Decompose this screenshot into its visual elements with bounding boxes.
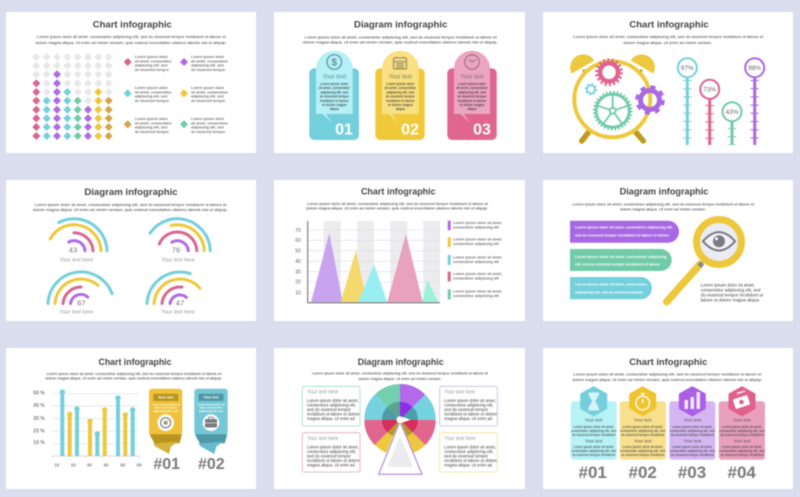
teal pill [570,277,652,299]
intro text: Lorem ipsum dolor sit amet, consectetur adipiscing elit, sed do eiusmod tempor incididunt ut labore et [307,201,489,206]
legend: do eiusmod tempor [135,67,170,72]
legend: adipiscing elit, sed [191,94,224,98]
card 02: do eiusmod tempor [386,95,416,99]
legend: sit amet, consectetur [135,89,172,94]
card 01 [309,51,359,140]
text box top left: Your text here [307,390,338,396]
icon: rising bars [684,392,700,409]
hex card 01: Lorem ipsum dolor sit amet, [573,445,614,449]
intro text [312,371,489,381]
card 03: 03 [473,122,491,138]
pink gear [597,60,621,85]
legend: do eiusmod tempor [135,98,170,103]
hex card 03: Lorem ipsum dolor sit amet, [672,425,713,429]
card 02: et dolore magna [388,103,413,107]
hex card 02: do eiusmod tempor incididunt [621,433,664,437]
side text: Lorem ipsum dolor sit amet, [701,283,755,288]
lollipop bar 97% [678,58,697,145]
card 02: 02 [401,122,419,138]
title: Chart infographic [629,356,707,367]
text box top right: consectetur adipiscing elit, [444,402,493,408]
panel: clock gears and lollipop bars [543,12,793,153]
bar chart: 60 [137,462,142,467]
legend: consectetur adipiscing elit [453,293,500,298]
bar chart: 50 % [33,390,45,396]
badge #01: adipiscing elit, sed [154,409,178,413]
bar chart: 40 [103,462,109,467]
legend [448,220,502,299]
legend: do eiusmod tempor [135,129,170,134]
teal pill: adipiscing elit, sed do eiusmod tempor [575,289,643,294]
purple pill: Lorem ipsum dolor sit amet, consectetur adipiscing elit, [575,224,673,230]
card 01: 01 [335,122,353,138]
title: Diagram infographic [84,186,178,197]
legend [125,54,229,134]
hex card 03: do eiusmod tempor incididunt [671,453,714,457]
hex card 01: consectetur adipiscing elit, sed [571,429,616,433]
title: Diagram infographic [358,356,444,367]
intro text: dolore magna aliqua. Ut enim ad minim veniam, quis nostrud exercitation ullamco laboris nisi ut aliquip. [33,207,228,212]
side text: do eiusmod tempor incididunt ut [701,292,764,298]
arc chart 76: 76 [172,246,180,254]
hex card 03 [669,387,715,460]
legend: Lorem ipsum dolor sit amet, [453,237,502,242]
card 03: sit amet, consectetur [456,86,489,90]
badge #01: Your text [158,396,174,400]
icon: eye [703,232,735,250]
arc chart 67: Your text here [60,310,93,316]
text box bottom left: consectetur adipiscing elit, [307,449,356,454]
panel: triangle chart [274,180,525,321]
icon: stopwatch [636,394,650,410]
intro text [572,201,755,211]
card 01: adipiscing elit, sed [320,90,348,94]
text box top left: consectetur adipiscing elit, [307,402,356,408]
triangle area chart: 10 [295,290,301,296]
panel: three numbered cards [274,12,525,153]
badge number 02: #02 [198,456,225,473]
legend: Lorem ipsum dolor [135,85,168,90]
hex card 04: Your text [733,418,752,423]
triangle area chart: 40 [295,259,301,265]
icon: calendar [394,56,406,69]
hex card 01: Your text [585,418,603,423]
legend: sit amet, consectetur [191,120,229,125]
intro text [33,202,228,212]
card 03: do eiusmod tempor [457,95,487,99]
hex card 01 [571,387,617,460]
lollipop bar 98%: 98% [748,65,761,72]
text box bottom left: incididunt ut labore et dolore [307,458,360,463]
bar chart: 50 [120,462,126,467]
hex card 03: Your text [683,439,702,444]
card 01: Your text [323,74,346,80]
intro text: dolore magna aliqua. Ut enim ad minim veniam, quis nostrud exercitation ullamco laboris nisi ut aliquip. [36,40,226,45]
icon: briefcase [203,414,219,431]
purple pill [570,221,679,243]
card 01: incididunt ut labore [320,99,349,103]
legend: adipiscing elit, sed [135,62,167,68]
legend: Lorem ipsum dolor sit amet, [453,254,502,260]
arc chart 47: 47 [176,299,184,308]
panel: four hexagon cards [543,348,793,489]
bar chart: 40 % [33,403,45,409]
hex card 04: consectetur adipiscing elit, sed [720,449,765,453]
badge #02: Your text [203,396,219,400]
intro text [573,34,764,45]
badge #01: amet, consectetur [154,406,177,410]
text box top right [440,386,498,426]
intro text: dolore magna aliqua. Ut enim ad minim veniam. [620,206,706,211]
intro text [306,201,489,211]
intro text: Lorem ipsum dolor sit amet, consectetur adipiscing elit, sed do eiusmod tempor incididunt ut labore et [305,34,498,40]
arc chart 67: 67 [77,299,86,308]
title: Diagram infographic [354,18,447,29]
panel: bar chart with badges [6,348,256,489]
text box bottom left: Lorem ipsum dolor sit amet, [307,444,359,449]
legend: sit amet, consectetur [191,58,229,63]
card 02: Lorem ipsum dolor [386,82,415,86]
hex card 01: do eiusmod tempor incididunt [572,453,615,457]
triangle area chart: 50 [295,248,301,254]
arc chart 43: 43 [69,246,77,254]
title: Chart infographic [629,18,709,29]
card 03: adipiscing elit, sed [458,90,486,94]
badge #02 [194,389,228,454]
green pill [570,249,672,271]
text box bottom right: consectetur adipiscing elit, [444,449,493,454]
text box top right: Your text here [444,390,476,396]
legend: consectetur adipiscing elit [453,275,500,280]
legend: Lorem ipsum dolor [191,116,225,121]
intro text [303,34,498,44]
badge #02: adipiscing elit, sed [199,409,223,413]
badge #01: Lorem ipsum dolor sit [152,402,180,406]
legend: Lorem ipsum dolor sit amet, [453,220,502,225]
intro text: dolore magna aliqua. Ut enim ad minim veniam, quis nostrud exercitation ullamco laboris nisi ut aliquip. [303,40,498,44]
hex card 03: Lorem ipsum dolor sit amet, [672,445,713,449]
lollipop bar 98% [745,58,764,145]
hex card 03: Your text [683,418,702,423]
icon: hourglass [588,392,599,410]
legend: sit amet, consectetur [135,120,172,125]
badge number 01: #01 [153,456,180,473]
intro text: Lorem ipsum dolor sit amet, consectetur adipiscing elit, sed do eiusmod tempor incididunt ut labore et [46,371,222,376]
arc chart 76 [150,219,210,263]
bar chart: 10 [54,462,60,467]
legend: Lorem ipsum dolor sit amet, [453,271,502,276]
green pill: elit, sed do eiusmod tempor incididunt ut labore [575,262,661,266]
card 03 [447,51,497,140]
hex card 03: do eiusmod tempor incididunt [671,433,714,437]
hex card 02: consectetur adipiscing elit, sed [620,449,665,453]
hex card 01: consectetur adipiscing elit, sed [571,449,616,453]
intro text: Lorem ipsum dolor sit amet, consectetur adipiscing elit, sed do eiusmod tempor incididunt ut labore et [312,371,489,376]
hex card 02: Lorem ipsum dolor sit amet, [622,445,663,449]
legend: adipiscing elit, sed [135,94,167,98]
text box bottom right [440,433,498,472]
card 03: Lorem ipsum dolor [458,82,487,86]
arc chart 47 [147,272,200,316]
triangle area chart: 30 [295,269,301,275]
hex card 04: Lorem ipsum dolor sit amet, [722,445,762,449]
hex card 04: do eiusmod tempor incididunt [720,433,764,437]
hex card 04 [719,387,765,460]
hex card 02: Your text [634,418,652,423]
hex card 01: do eiusmod tempor incididunt [572,433,615,437]
green gear [594,92,631,129]
hex card 04: do eiusmod tempor incididunt [720,453,764,457]
number 02: #02 [629,463,657,482]
intro text: Lorem ipsum dolor sit amet, consectetur adipiscing elit, sed do eiusmod tempor incididunt ut labore et [37,34,227,39]
legend: adipiscing elit, sed [191,62,224,68]
badge #02: amet, consectetur [199,406,223,410]
icon: money [733,391,750,409]
card 01: do eiusmod tempor [320,95,350,99]
text box top right: incididunt ut labore et dolore [444,412,498,416]
intro text: dolore magna aliqua. Ut enim ad minim veniam, quis nostrud exercitation ullamco laboris nisi ut aliquip. [306,206,488,211]
purple pill: sed do eiusmod tempor incididunt ut labore et dolore [575,232,670,238]
icon: target [157,414,174,431]
title: Chart infographic [361,186,436,197]
intro text: Lorem ipsum dolor sit amet, consectetur adipiscing elit, sed do eiusmod tempor incididunt ut labore et [34,202,227,207]
legend: Lorem ipsum dolor [191,54,225,59]
hex card 04: consectetur adipiscing elit, sed [720,429,765,433]
bar chart: 30 [87,462,92,467]
legend: do eiusmod tempor [191,67,226,72]
hex card 02 [620,387,666,460]
legend: Lorem ipsum dolor [135,54,168,59]
card 02: incididunt ut labore [386,99,415,103]
card 02: Your text [389,74,412,80]
wheel diagram [364,384,436,474]
card 02 [375,51,425,140]
card 02: aliqua [396,107,405,111]
badge #01 [149,389,182,454]
bar chart: 20 % [33,428,45,434]
card 03: incididunt ut labore [458,99,486,103]
card 02: sit amet, consectetur [385,86,417,90]
legend: do eiusmod tempor [191,98,226,103]
triangle area chart: 70 [295,228,301,234]
text box top left: incididunt ut labore et dolore [307,412,360,416]
card 03: et dolore magna [460,103,484,107]
intro text: dolore magna aliqua. Ut enim ad minim veniam, quis nostrud exercitation ullamco laboris nisi ut aliquip. [572,377,762,382]
intro text [45,371,222,380]
bar chart: 10 % [33,440,45,446]
panel: magnifying glass [543,180,793,321]
arc chart 47: Your text here [161,310,195,316]
card 03: Your text [460,74,484,80]
text box top right: magna aliqua. Ut enim ad [444,416,493,421]
text box top right: sed do eiusmod tempor [444,407,489,412]
title: Chart infographic [98,356,172,367]
intro text: dolore magna aliqua. Ut enim ad minim veniam, quis nostrud exercitation ullamco laboris nisi ut aliquip. [45,376,222,380]
legend: Lorem ipsum dolor [191,85,225,90]
hex card 02: do eiusmod tempor incididunt [621,453,664,457]
intro text [572,372,762,382]
legend: adipiscing elit, sed [191,124,224,130]
card 01: aliqua [330,107,339,111]
title: Chart infographic [93,18,172,29]
text box top right: Lorem ipsum dolor sit amet, [444,398,496,403]
hex card 03: consectetur adipiscing elit, sed [670,429,715,433]
text box top left [302,386,360,426]
hex card 02: consectetur adipiscing elit, sed [620,429,665,433]
text box bottom right: incididunt ut labore et dolore [444,458,498,463]
number 04: #04 [728,463,756,482]
intro text: Lorem ipsum dolor sit amet, consectetur adipiscing elit, sed do eiusmod tempor incididunt ut labore et [573,372,762,377]
intro text: Lorem ipsum dolor sit amet, consectetur adipiscing elit, sed do eiusmod tempor incididunt ut labore et [573,34,764,39]
side text: consectetur adipiscing elit, sed [701,288,761,293]
text box top left: Lorem ipsum dolor sit amet, [307,398,359,403]
alarm clock with gears [565,50,663,141]
legend: adipiscing elit, sed [135,124,167,130]
card 01: Lorem ipsum dolor [320,82,349,86]
legend: Lorem ipsum dolor sit amet, [453,289,502,294]
diamond grid chart [33,54,112,139]
bar chart: 30 % [33,416,45,422]
text box bottom left: Your text here [307,436,338,442]
triangle area chart: 60 [295,238,301,244]
legend: consectetur adipiscing elit [453,259,500,264]
arc chart 43 [50,219,107,263]
bar chart [33,389,142,467]
green pill: Lorem ipsum dolor sit amet, consectetur adipiscing [575,254,667,259]
intro text: dolore magna aliqua. Ut enim ad minim veniam. [623,40,712,45]
legend: do eiusmod tempor [191,129,226,134]
text box top left: sed do eiusmod tempor [307,407,351,412]
text box bottom left [302,433,360,472]
hex card 02: Your text [634,439,652,444]
triangle area chart: 20 [295,280,301,286]
icon: dollar coin: $ [332,58,338,68]
lollipop bar 97%: 97% [681,65,694,72]
hex card 02: Lorem ipsum dolor sit amet, [622,425,663,429]
hex card 01: Your text [585,439,603,444]
magnifying glass with eye [667,220,742,302]
text box top left: magna aliqua. Ut enim ad [307,416,355,421]
lollipop bar 73% [700,80,719,145]
teal pill: Lorem ipsum dolor sit amet, consectetur [575,282,647,286]
panel: colour wheel [274,348,525,489]
hex card 01: Lorem ipsum dolor sit amet, [573,425,614,429]
badge #02: Lorem ipsum dolor sit [197,402,225,406]
intro text: Lorem ipsum dolor sit amet, consectetur adipiscing elit, sed do eiusmod tempor incididunt ut labore et [572,201,755,206]
purple gear [637,87,663,113]
hex card 04: Your text [733,439,752,444]
icon: clock [465,55,479,69]
lollipop bar 73%: 73% [703,87,716,94]
text box bottom right: Your text here [444,436,476,442]
intro text: dolore magna aliqua. Ut enim ad minim veniam. [358,376,442,381]
text box bottom right: Lorem ipsum dolor sit amet, [444,444,496,449]
triangle area chart [295,221,440,303]
legend: sit amet, consectetur [135,58,172,63]
text box bottom right: magna aliqua. Ut enim ad [444,462,493,467]
legend: consectetur adipiscing elit [453,241,500,246]
panel: rainbow arcs [6,180,256,321]
number 03: #03 [678,463,706,482]
text box bottom left: magna aliqua. Ut enim ad [307,462,355,467]
number 01: #01 [579,463,607,482]
arc chart 67 [48,272,112,316]
small teal gear [586,84,596,95]
panel: diamond pictogram chart [6,12,256,153]
side text: labore et dolore magna aliqua. [701,297,760,302]
card 01: sit amet, consectetur [319,86,351,90]
card 01: et dolore magna [322,103,347,107]
arc chart 43: Your text here [60,257,93,263]
legend: sit amet, consectetur [191,89,229,94]
hex card 03: consectetur adipiscing elit, sed [670,449,715,453]
arc chart 76: Your text here [161,257,195,263]
bar chart: 20 [71,462,76,467]
legend: consectetur adipiscing elit [453,224,500,229]
lollipop bar 43% [722,102,742,145]
hex card 04: Lorem ipsum dolor sit amet, [722,425,762,429]
title: Diagram infographic [620,186,708,197]
card 03: aliqua [467,107,477,111]
legend: Lorem ipsum dolor [135,116,168,121]
lollipop bar 43%: 43% [726,109,739,116]
text box bottom left: sed do eiusmod tempor [307,453,351,458]
card 02: adipiscing elit, sed [386,90,414,94]
text box bottom right: sed do eiusmod tempor [444,453,489,458]
intro text [36,34,227,45]
